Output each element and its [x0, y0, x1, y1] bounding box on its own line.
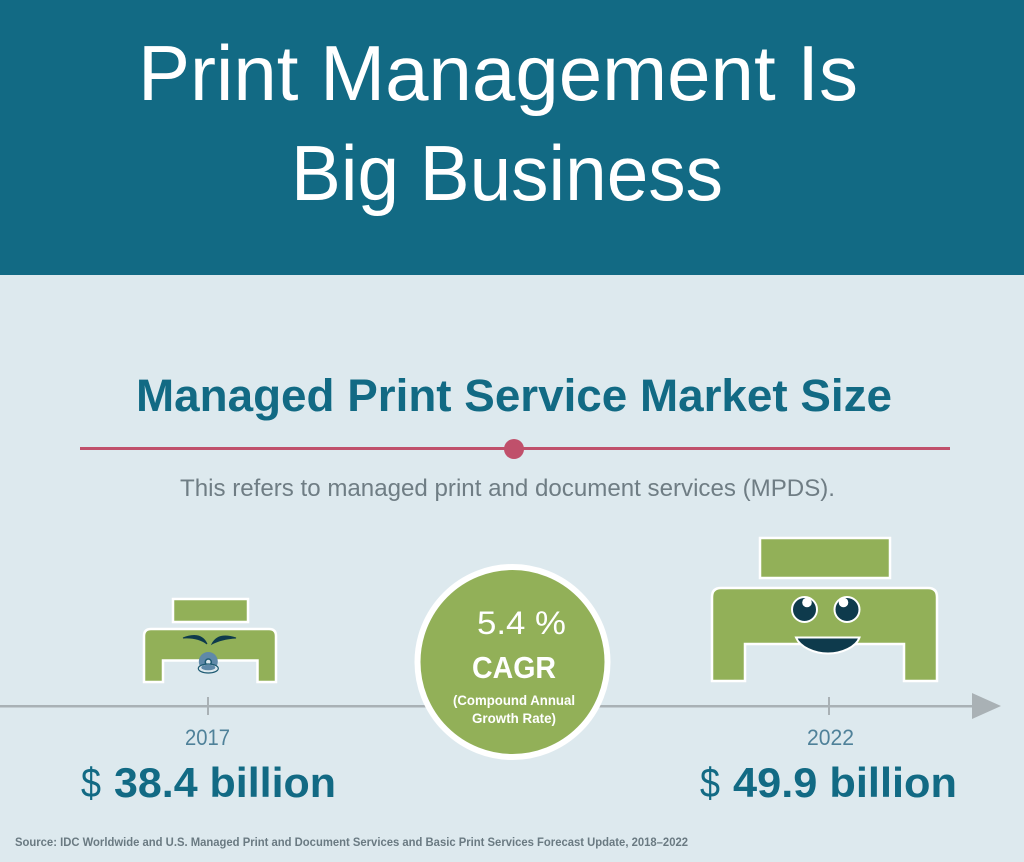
- icon: pacifier: [198, 652, 218, 673]
- 2022 market value: $: [700, 759, 720, 806]
- source note: Source: IDC Worldwide and U.S. Managed Print and Document Services and Basic Print Services Forecast Update, 2018–2022: [15, 837, 688, 849]
- title: Big Business: [291, 129, 723, 217]
- CAGR description: (Compound Annual: [453, 693, 575, 708]
- subtitle: This refers to managed print and document services (MPDS).: [180, 475, 835, 502]
- CAGR circle callout: [418, 567, 608, 757]
- heading divider with dot: [80, 439, 950, 459]
- title: [138, 29, 858, 217]
- 2022 market value: 49.9 billion: [733, 759, 957, 806]
- CAGR description: Growth Rate): [472, 711, 556, 726]
- 2017 year label: 2017: [185, 725, 230, 750]
- 2017 market value: $: [81, 759, 101, 806]
- title: Print Management Is: [138, 29, 858, 117]
- 2022 year label: 2022: [807, 725, 854, 750]
- header banner: [0, 0, 1024, 275]
- CAGR description: [453, 693, 575, 726]
- timeline axis arrow: [0, 693, 1001, 719]
- 2017 market value: 38.4 billion: [114, 759, 336, 806]
- icon: happy large printer 2022: [712, 538, 937, 681]
- CAGR value: 5.4 %: [477, 605, 566, 641]
- section heading: Managed Print Service Market Size: [136, 370, 892, 421]
- icon: sleeping small printer 2017: [144, 599, 276, 682]
- CAGR label: CAGR: [472, 650, 556, 685]
